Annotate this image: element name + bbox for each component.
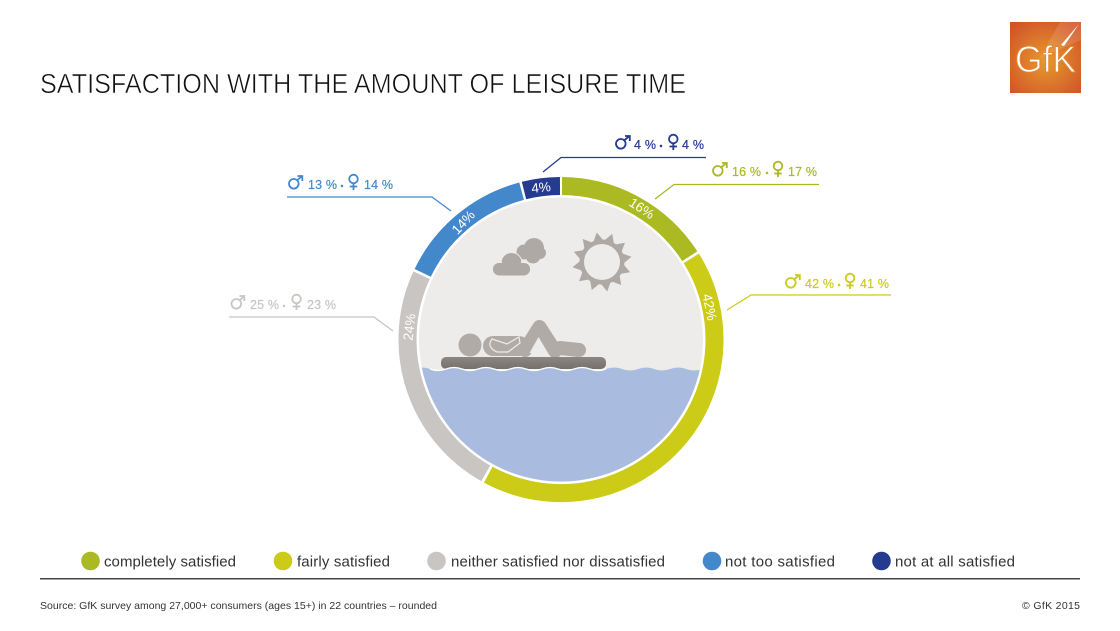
ring value labels: 14% [449,207,478,237]
ring value labels: 4% [531,179,552,196]
water [415,368,702,490]
ring value labels: 42% [699,292,720,322]
callout: not at all satisfied: 4 % [634,138,656,152]
ring value labels: 16% [626,195,657,222]
callout: neither satisfied nor dissatisfied [229,295,393,331]
icon: clouds [493,238,546,276]
ring value labels [400,179,720,341]
callout: fairly satisfied [727,274,891,310]
legend item: neither satisfied nor dissatisfied: neither satisfied nor dissatisfied [451,554,665,570]
icon: GfK logo: GfK [1015,39,1076,80]
legend item: fairly satisfied: fairly satisfied [297,554,390,570]
callout: not at all satisfied [543,135,706,172]
copyright: © GfK 2015 [1022,600,1080,612]
icon: sun [572,232,632,292]
callout: fairly satisfied: 42 % [805,277,834,291]
icon: person lying on air mattress [441,327,606,369]
source note: Source: GfK survey among 27,000+ consumers (ages 15+) in 22 countries – rounded [40,600,437,612]
callout: not at all satisfied: 4 % [682,138,704,152]
title: SATISFACTION WITH THE AMOUNT OF LEISURE TIME [40,68,686,99]
callout: not too satisfied [287,175,451,211]
ring value labels: 24% [400,313,419,341]
icon: GfK logo [1010,22,1081,93]
legend item: not at all satisfied: not at all satisfied [895,554,1015,570]
callout: neither satisfied nor dissatisfied: 23 % [307,298,336,312]
callout: completely satisfied: 17 % [788,165,817,179]
callout: not too satisfied: 14 % [364,178,393,192]
inner disc scene [415,198,703,490]
donut chart: satisfaction [400,179,720,493]
callout: neither satisfied nor dissatisfied: 25 % [250,298,279,312]
legend [81,552,1015,570]
legend item: not too satisfied: not too satisfied [725,554,835,570]
callout: completely satisfied: 16 % [732,165,761,179]
callout: completely satisfied [655,162,819,199]
callout: fairly satisfied: 41 % [860,277,889,291]
legend item: completely satisfied: completely satisfied [104,554,236,570]
callout: not too satisfied: 13 % [308,178,337,192]
ring segments [407,186,715,493]
